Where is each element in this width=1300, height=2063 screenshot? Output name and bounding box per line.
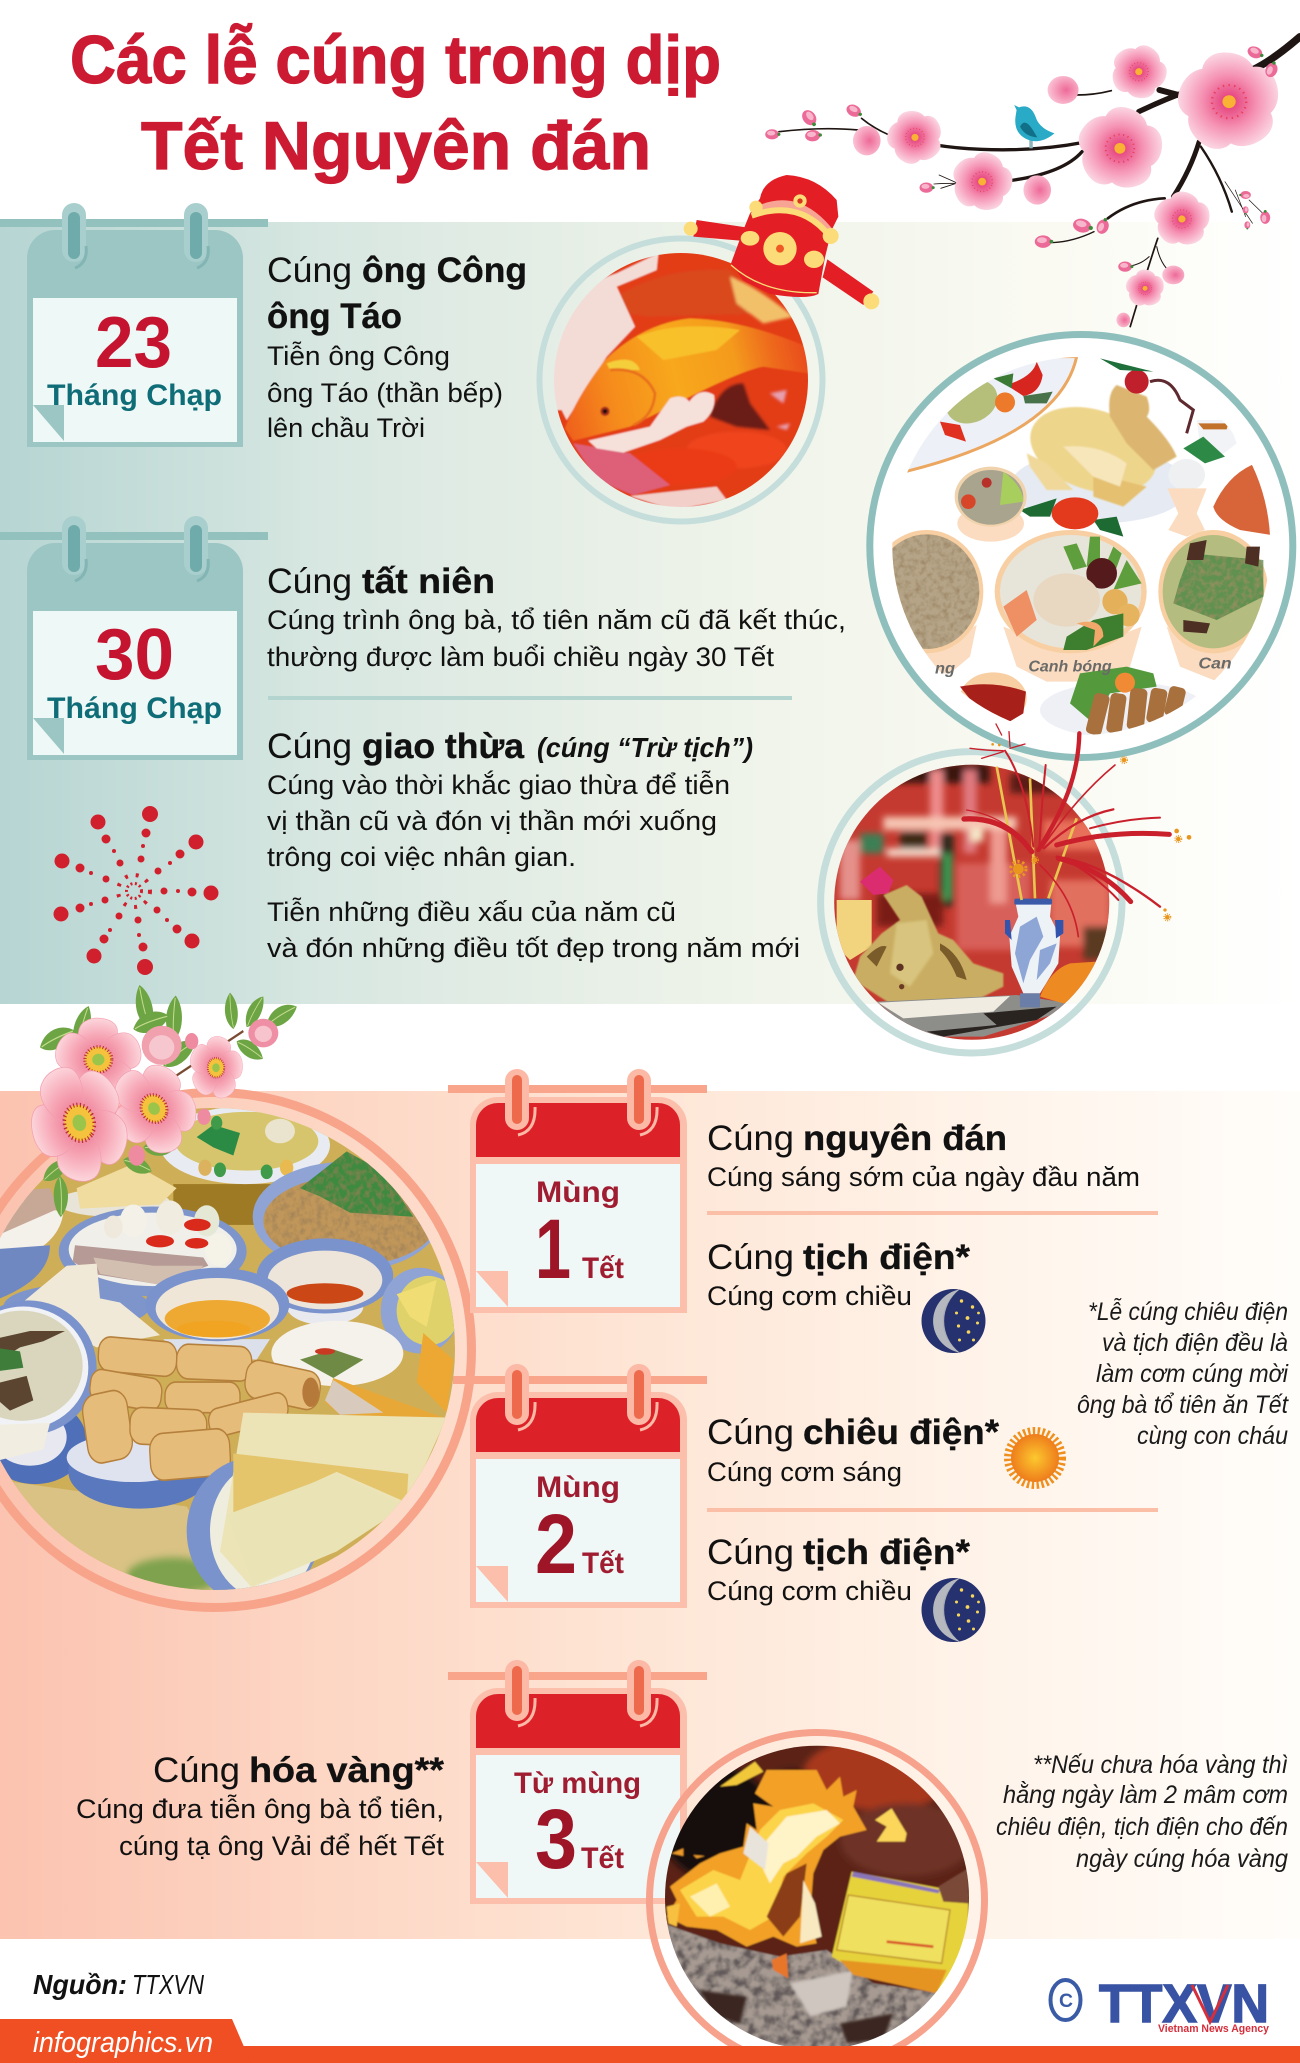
calendar: Mùng 1 Tết: 1 xyxy=(535,1202,571,1296)
icon: sun xyxy=(1008,1431,1062,1485)
top plate salad xyxy=(160,1107,330,1184)
buds xyxy=(765,44,1280,272)
calendar: 30 Tháng Chạp xyxy=(0,516,268,760)
footnote: chiêu điện and tịch điện: và tịch điện đều là xyxy=(1102,1329,1288,1357)
text: Cúng tất niên description: thường được làm buổi chiều ngày 30 Tết xyxy=(267,642,775,672)
text: Cúng hóa vàng description: Cúng đưa tiễn ông bà tổ tiên, xyxy=(76,1793,444,1824)
pineapple plate right xyxy=(381,1268,459,1353)
sliced chicken plate xyxy=(65,1192,170,1216)
egg in cup xyxy=(1172,459,1205,488)
calendar: Mùng 1 Tết: Mùng xyxy=(536,1176,620,1209)
text: Cúng giao thừa description: Cúng vào thời khắc giao thừa để tiễn xyxy=(267,769,730,800)
icon: moon second xyxy=(922,1578,986,1642)
heading: Cúng giao thừa xyxy=(267,727,753,766)
sticky rice cake xyxy=(187,1458,320,1604)
calendar: Mùng 1 Tết: Tết xyxy=(582,1252,624,1285)
photo: burning votive paper xyxy=(650,1732,984,2063)
vase xyxy=(1009,900,1060,993)
heading: Cúng tịch điện xyxy=(707,1238,970,1277)
heading: Cúng chiêu điện: chiêu điện* xyxy=(803,1413,999,1452)
icon: firework of red dots xyxy=(54,806,218,975)
text: Cúng giao thừa description xyxy=(267,769,730,872)
heading: Cúng chiêu điện xyxy=(707,1413,999,1452)
footnote: chiêu điện and tịch điện xyxy=(1077,1297,1289,1450)
heading: Cúng tất niên: tất niên xyxy=(362,562,495,601)
dish labels: ng xyxy=(935,660,956,677)
sauce bowl centre xyxy=(163,1339,270,1360)
heading: Cúng ông Công ông Táo: ông Công xyxy=(362,251,527,290)
bottom panel background xyxy=(0,1091,1300,1939)
footnote: hóa vàng: **Nếu chưa hóa vàng thì xyxy=(1033,1751,1288,1779)
chicken xyxy=(1015,462,1176,524)
carp background fish xyxy=(622,270,792,468)
calendar: Mùng 1 Tết xyxy=(448,1069,707,1313)
heading: Cúng giao thừa: (cúng “Trừ tịch”) xyxy=(537,732,753,763)
hand xyxy=(547,253,658,420)
calendar: 23 Tháng Chạp: Tháng Chạp xyxy=(47,379,222,412)
tomato rose xyxy=(1020,498,1123,537)
spring rolls xyxy=(80,1336,322,1481)
text: Tiễn những điều xấu: và đón những điều tốt đẹp trong năm mới xyxy=(267,933,800,963)
dish labels: Canh bóng xyxy=(1028,659,1112,676)
heading: Cúng ông Công ông Táo: ông Táo xyxy=(267,297,402,336)
footnote: hóa vàng: ngày cúng hóa vàng xyxy=(1076,1845,1288,1873)
dish labels xyxy=(935,655,1232,677)
heading: Cúng hóa vàng: Cúng xyxy=(153,1751,240,1790)
footnote: chiêu điện and tịch điện: cùng con cháu xyxy=(1137,1422,1288,1450)
heading: Cúng nguyên đán: nguyên đán xyxy=(803,1119,1007,1158)
photo: ancestral altar with chicken and vase xyxy=(821,752,1122,1053)
plates xyxy=(877,995,1070,1037)
calendar: 23 Tháng Chạp: 23 xyxy=(95,303,172,383)
heading: Cúng tịch điện second xyxy=(707,1533,970,1572)
dish labels: Can xyxy=(1198,655,1232,672)
logo: TTXVN Vietnam News Agency: C xyxy=(1059,1991,1073,2012)
text: Tiễn những điều xấu: Tiễn những điều xấu của năm cũ xyxy=(267,896,676,927)
source credit: Nguồn: xyxy=(33,1969,127,2000)
tofu sausage plate left xyxy=(4,1286,148,1318)
text: Cúng tất niên description xyxy=(267,605,846,672)
heading: Cúng tịch điện: Cúng xyxy=(707,1238,794,1277)
ash pile xyxy=(663,1923,960,2050)
platter with melon and peppers xyxy=(900,357,1077,472)
source credit: TTXVN xyxy=(132,1969,205,2000)
text: Cúng ông Công ông Táo description: lên chầu Trời xyxy=(267,413,425,443)
bottom rolls plate xyxy=(68,1465,208,1509)
left plate xyxy=(0,1416,86,1484)
heading: Cúng tất niên xyxy=(267,562,495,601)
logo: TTXVN Vietnam News Agency: Vietnam News Agency xyxy=(1158,2023,1270,2035)
source credit xyxy=(33,1969,205,2000)
heading: Cúng tất niên: Cúng xyxy=(267,562,352,601)
calendar: Mùng 2 Tết: Tết xyxy=(582,1547,624,1580)
red firework strokes xyxy=(964,724,1169,937)
text: Cúng ông Công ông Táo description: ông Táo (thần bếp) xyxy=(267,378,503,408)
icon: pink peach blossoms with leaves xyxy=(5,984,300,1218)
white dish xyxy=(271,1321,403,1386)
text: Tiễn những điều xấu xyxy=(267,896,800,963)
logo: TTXVN Vietnam News Agency: TTXVN xyxy=(1099,1974,1269,2034)
small bowl xyxy=(957,514,1024,542)
calendar: 23 Tháng Chạp xyxy=(0,203,268,447)
text: Cúng cơm chiều: Cúng cơm chiều xyxy=(707,1281,912,1311)
text: Cúng giao thừa description: trông coi việc nhân gian. xyxy=(267,842,576,872)
altar chicken xyxy=(853,885,1003,1003)
photo: festive Tết meal xyxy=(0,1092,472,1608)
calendar: Từ mùng 3 Tết: Tết xyxy=(581,1842,624,1875)
fingers xyxy=(588,392,714,453)
carp xyxy=(565,318,808,441)
calendar: Từ mùng 3 Tết xyxy=(448,1660,707,1904)
heading: Cúng giao thừa: giao thừa xyxy=(362,727,525,766)
top panel background xyxy=(0,222,1300,1004)
footnote: chiêu điện and tịch điện: làm cơm cúng mời xyxy=(1096,1360,1289,1388)
votive paper xyxy=(832,1872,968,1993)
title: Các lễ cúng trong dịp xyxy=(70,22,721,98)
rice xyxy=(1213,465,1272,535)
spring rolls xyxy=(1040,684,1196,735)
heading: Cúng tịch điện second: Cúng xyxy=(707,1533,794,1572)
calendar: 30 Tháng Chạp: 30 xyxy=(95,615,174,695)
heading: Cúng nguyên đán xyxy=(707,1119,1007,1158)
top left bowl xyxy=(0,1201,64,1249)
text: Cúng nguyên đán description: Cúng sáng sớm của ngày đầu năm xyxy=(707,1162,1140,1192)
calendar: 30 Tháng Chạp: Tháng Chạp xyxy=(47,692,222,725)
text: Cúng cơm sáng: Cúng cơm sáng xyxy=(707,1457,902,1487)
icon: moon xyxy=(922,1289,986,1353)
heading: Cúng chiêu điện: Cúng xyxy=(707,1413,794,1452)
jellied meat plate xyxy=(59,1207,247,1296)
calendar: Từ mùng 3 Tết: Từ mùng xyxy=(514,1767,641,1800)
heading: Cúng ông Công ông Táo: Cúng xyxy=(267,251,352,290)
soup bowls xyxy=(925,625,977,674)
hand xyxy=(938,1868,968,1903)
icon: red mandarin hat xyxy=(684,175,879,309)
calendar: Mùng 2 Tết xyxy=(453,1364,707,1608)
text: Cúng cơm chiều second: Cúng cơm chiều xyxy=(707,1576,912,1606)
leaves xyxy=(38,984,300,1218)
sauce bowl right xyxy=(288,1307,364,1324)
footer site name: infographics.vn xyxy=(33,2027,213,2059)
incense sticks xyxy=(997,767,1077,900)
congee bowl xyxy=(0,1300,97,1435)
photo: offering dishes tray xyxy=(870,334,1293,758)
heading: Cúng hóa vàng xyxy=(153,1751,444,1790)
sauce xyxy=(960,672,1027,724)
text: Cúng ông Công ông Táo description xyxy=(267,340,503,443)
branch xyxy=(779,37,1300,327)
heading: Cúng hóa vàng: hóa vàng** xyxy=(249,1751,444,1790)
noodle salad plate xyxy=(252,1162,430,1266)
calendar: Mùng 2 Tết: 2 xyxy=(535,1497,577,1591)
orange sparks xyxy=(991,743,1191,921)
icon: blossom branch with bird xyxy=(765,34,1300,327)
large blossoms xyxy=(853,34,1285,327)
title xyxy=(70,22,721,184)
heading: Cúng tịch điện second: tịch điện* xyxy=(803,1533,970,1572)
heading: Cúng nguyên đán: Cúng xyxy=(707,1119,794,1158)
heading: Cúng giao thừa: Cúng xyxy=(267,727,352,766)
text: Cúng giao thừa description: vị thần cũ và đón vị thần mới xuống xyxy=(267,806,717,836)
footnote: hóa vàng xyxy=(996,1751,1288,1873)
heading: Cúng tịch điện: tịch điện* xyxy=(803,1238,970,1277)
text: Cúng ông Công ông Táo description: Tiễn ông Công xyxy=(267,340,450,371)
icon: fireworks and incense over altar xyxy=(964,724,1191,937)
icon: bird xyxy=(1014,105,1054,148)
photo: carp in hands xyxy=(540,238,822,522)
flames xyxy=(667,1770,867,1947)
title: Tết Nguyên đán xyxy=(141,108,651,184)
calendar: Từ mùng 3 Tết: 3 xyxy=(535,1792,577,1886)
teacup and mint xyxy=(1197,420,1237,455)
yellow cakes xyxy=(417,1333,453,1413)
text: Cúng tất niên description: Cúng trình ông bà, tổ tiên năm cũ đã kết thúc, xyxy=(267,605,846,635)
footnote: chiêu điện and tịch điện: ông bà tổ tiên ăn Tết xyxy=(1077,1391,1289,1419)
text: Cúng hóa vàng description xyxy=(76,1793,444,1861)
text: Cúng hóa vàng description: cúng tạ ông Vải để hết Tết xyxy=(119,1831,444,1861)
blossoms xyxy=(5,1018,278,1212)
footnote: hóa vàng: hằng ngày làm 2 mâm cơm xyxy=(1003,1780,1288,1809)
heading: Cúng ông Công ông Táo xyxy=(267,251,527,336)
footer bar xyxy=(0,2019,1300,2063)
calendar: Mùng 2 Tết: Mùng xyxy=(536,1471,620,1504)
